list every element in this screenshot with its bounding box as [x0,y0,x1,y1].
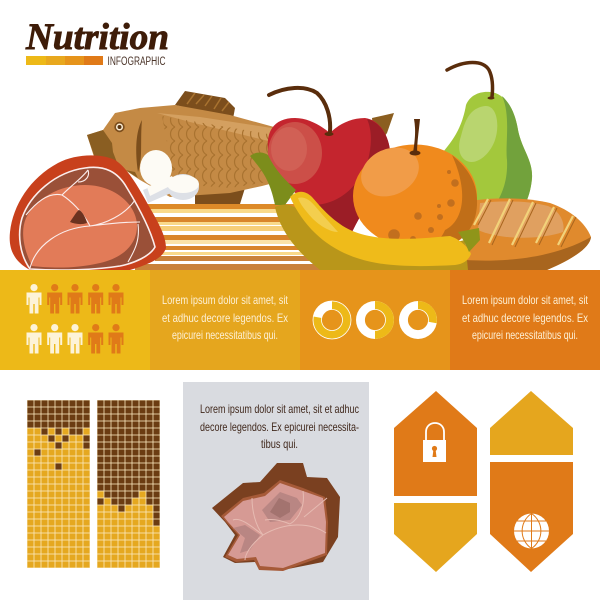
band panels [0,270,600,370]
chicken bone [140,150,199,203]
pear stem [447,62,493,97]
waffle chart left [27,400,90,568]
subtitle: Infographic: INFOGRAPHIC [108,56,166,68]
fish body [87,105,285,197]
panel: text one: epicurei necessitatibus qui. [172,328,278,342]
ham steak [10,155,166,270]
apple highlight [268,122,322,184]
apple [268,88,390,232]
apple stem [269,88,330,131]
panel: gray meat card [183,382,369,600]
bread crust [460,198,591,270]
fish [87,91,394,204]
fish eye [114,122,125,132]
panel: donut charts [300,270,450,370]
pear [443,62,532,205]
fish gill [136,120,142,172]
pictogram row 1 [26,284,124,314]
waffle chart right [97,400,160,568]
panel: text two [450,270,600,370]
tab: lock top [394,391,477,496]
ham marbling [26,170,140,268]
fish light back [157,113,285,145]
orange spots [388,170,459,242]
orange highlight [353,138,427,206]
apple shade [312,119,390,232]
panel: people pictogram [0,270,150,370]
fish scales [162,116,280,188]
card text: Lorem ipsum dolor sit amet, sit et adhuc [200,402,359,416]
orange body [353,144,477,248]
banana tip [458,228,480,252]
ham rind [10,155,166,270]
donut 1 [313,301,351,339]
pear body [443,92,532,205]
title [25,17,169,68]
fish head shade [87,130,138,178]
bread loaf [460,198,591,270]
card text [200,402,359,451]
meat marbling [233,491,327,560]
bread light top [478,201,564,238]
donut 2 [356,301,394,339]
apple body [268,118,390,232]
ham bone hole [70,210,87,224]
icon: globe [514,514,549,548]
fish lower fin [195,186,245,204]
tab: yellow upper right [490,391,573,455]
pear shade [495,96,532,205]
striped table [135,204,335,270]
orange stem [413,119,420,153]
panel: text one: Lorem ipsum dolor sit amet, sit [162,293,289,307]
orange [353,119,477,248]
meat rim [221,480,328,571]
banana highlight [298,197,338,232]
banana yellow side [290,192,471,266]
card text: tibus qui. [261,437,298,451]
tab: globe bottom [490,462,573,572]
tab: yellow lower left [394,503,477,572]
banana shadow side [275,205,468,270]
ham dark flesh with fat edge [20,167,155,270]
fish dorsal fin [175,91,235,119]
title colour bar [26,56,103,65]
meat dark patches [262,492,302,522]
title: Nutrition: Nutrition [25,17,169,58]
banana [250,152,480,270]
icon: padlock [423,423,446,462]
fish tail [372,113,394,150]
pear highlight [459,106,497,162]
panel: text one: et adhuc decore legendos. Ex [162,311,288,325]
card text: decore legendos. Ex epicurei necessita- [200,420,359,434]
hexagon tabs [394,391,573,572]
panel: text one [150,270,300,370]
bread underside shade [460,237,591,270]
ham pink flesh [23,185,137,268]
pictogram row 2 [26,324,124,354]
bread grill marks [474,199,573,245]
meat outer crust [212,463,340,570]
banana stalk [250,152,296,205]
donut 3 [399,301,437,339]
meat cut illustration [212,463,340,571]
meat pink flesh [224,483,326,568]
orange shade [438,155,477,245]
